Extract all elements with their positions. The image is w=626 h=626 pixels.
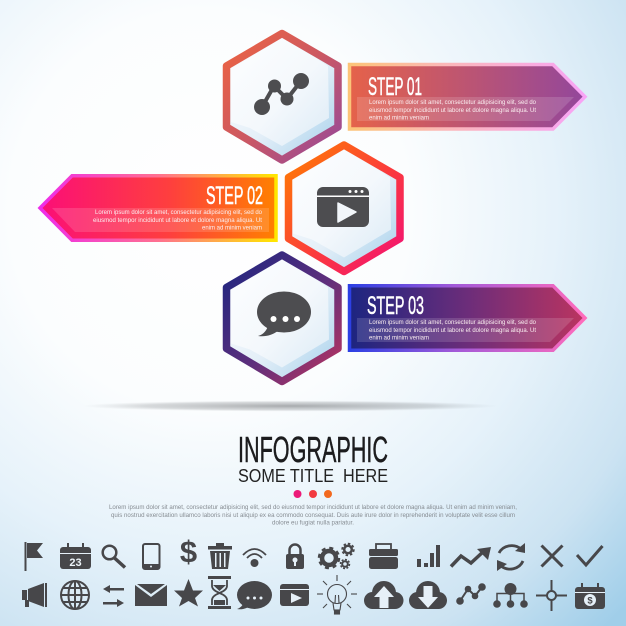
icon: hourglass bbox=[208, 576, 231, 609]
icon: gears bbox=[319, 544, 354, 568]
arrow banner: step 03 bbox=[350, 286, 585, 350]
icon: magnifier bbox=[103, 546, 125, 568]
icon: sync arrows bbox=[497, 543, 525, 571]
paragraph: dolore eu fugiat nulla pariatur. bbox=[272, 520, 354, 526]
paragraph: Lorem ipsum dolor sit amet, consectetur adipisicing elit, sed do eiusmod tempor incididunt ut labore et dolore magna aliqua. Ut enim ad minim veniam, bbox=[109, 505, 517, 511]
icon: light bulb bbox=[317, 575, 357, 614]
icon: line nodes bbox=[254, 73, 309, 115]
hexagon: step 03 bbox=[226, 254, 338, 382]
step description: eiusmod tempor incididunt ut labore et dolore magna aliqua. Ut bbox=[369, 327, 536, 334]
step description bbox=[93, 209, 262, 232]
icon: speech bubble bbox=[257, 292, 311, 336]
icon: bar chart bbox=[417, 545, 440, 567]
step heading: STEP 02 bbox=[206, 182, 263, 210]
step heading: STEP 01 bbox=[368, 73, 422, 101]
icon: megaphone bbox=[22, 583, 47, 607]
subtitle: SOME TITLE HERE bbox=[238, 466, 388, 486]
icon: crosshair bbox=[536, 580, 567, 611]
icon: wifi bbox=[243, 549, 266, 567]
step description: eiusmod tempor incididunt ut labore et dolore magna aliqua. Ut bbox=[93, 217, 262, 224]
text band bbox=[357, 97, 574, 121]
hexagon: step 02 bbox=[288, 144, 400, 272]
step description: Lorem ipsum dolor sit amet, consectetur adipisicing elit, sed do bbox=[369, 99, 536, 106]
icon: briefcase bbox=[369, 544, 398, 569]
step description: enim ad minim veniam bbox=[202, 224, 262, 232]
step description bbox=[369, 319, 536, 342]
step description: Lorem ipsum dolor sit amet, consectetur adipisicing elit, sed do bbox=[95, 209, 262, 216]
icon: video player bbox=[317, 187, 369, 227]
step description: enim ad minim veniam bbox=[369, 114, 429, 122]
arrow banner: step 01 bbox=[350, 64, 585, 129]
step description bbox=[369, 99, 536, 122]
icon: calendar 23 bbox=[60, 543, 91, 569]
icon: cloud upload bbox=[364, 581, 404, 609]
arrow banner: step 02 bbox=[40, 176, 276, 240]
hexagon: step 01 bbox=[226, 33, 338, 160]
icon: globe bbox=[61, 581, 89, 609]
step heading: STEP 03 bbox=[367, 292, 424, 320]
icon: node line bbox=[456, 583, 486, 605]
step description: enim ad minim veniam bbox=[369, 334, 429, 342]
icon: trend arrow bbox=[451, 547, 491, 566]
icon: flag bbox=[24, 542, 43, 571]
icon: cloud download bbox=[409, 581, 447, 609]
icon set bbox=[22, 534, 605, 614]
decorative dots bbox=[294, 490, 332, 498]
icon: check mark bbox=[577, 546, 602, 565]
ground shadow bbox=[82, 400, 498, 412]
paragraph: quis nostrud exercitation ullamco laboris nisi ut aliquip ex ea commodo consequat. Duis aute irure dolor in reprehenderit in voluptate velit esse cillum bbox=[111, 513, 515, 519]
icon: payment calendar: $ bbox=[587, 596, 593, 606]
icon: chat bubble bbox=[237, 581, 272, 609]
paragraph bbox=[109, 505, 517, 526]
icon: payment calendar bbox=[575, 583, 605, 609]
icon: star bbox=[174, 579, 203, 606]
title: INFOGRAPHIC bbox=[238, 429, 388, 470]
step description: Lorem ipsum dolor sit amet, consectetur adipisicing elit, sed do bbox=[369, 319, 536, 326]
icon: dollar: $ bbox=[180, 534, 197, 569]
icon: trash can bbox=[208, 543, 232, 569]
text band bbox=[52, 208, 269, 232]
icon: video window bbox=[280, 584, 309, 606]
icon: cross bbox=[542, 546, 562, 566]
icon: hierarchy bbox=[493, 583, 528, 608]
icon: tablet bbox=[143, 544, 160, 569]
icon: envelope bbox=[135, 584, 167, 606]
icon: padlock bbox=[286, 544, 304, 569]
step description: eiusmod tempor incididunt ut labore et dolore magna aliqua. Ut bbox=[369, 107, 536, 114]
icon: calendar 23: 23 bbox=[69, 557, 82, 569]
text band bbox=[357, 318, 574, 342]
icon: transfer arrows bbox=[103, 585, 124, 607]
